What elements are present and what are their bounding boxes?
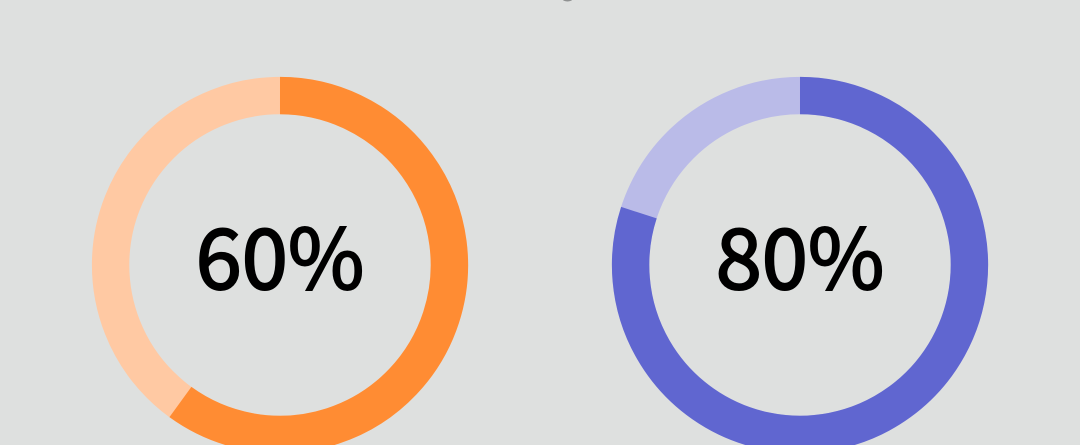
value arc: 60% xyxy=(180,96,449,434)
value arc: 80% xyxy=(631,96,969,434)
remaining track: 20% xyxy=(631,96,969,434)
remaining track: 40% xyxy=(111,96,449,434)
value label: 60%: 60% xyxy=(196,193,364,313)
donut chart: 60% xyxy=(111,96,449,434)
clipped descender of title at top edge xyxy=(562,0,572,2)
donut chart: 80% xyxy=(631,96,969,434)
value label: 80%: 80% xyxy=(716,193,884,313)
